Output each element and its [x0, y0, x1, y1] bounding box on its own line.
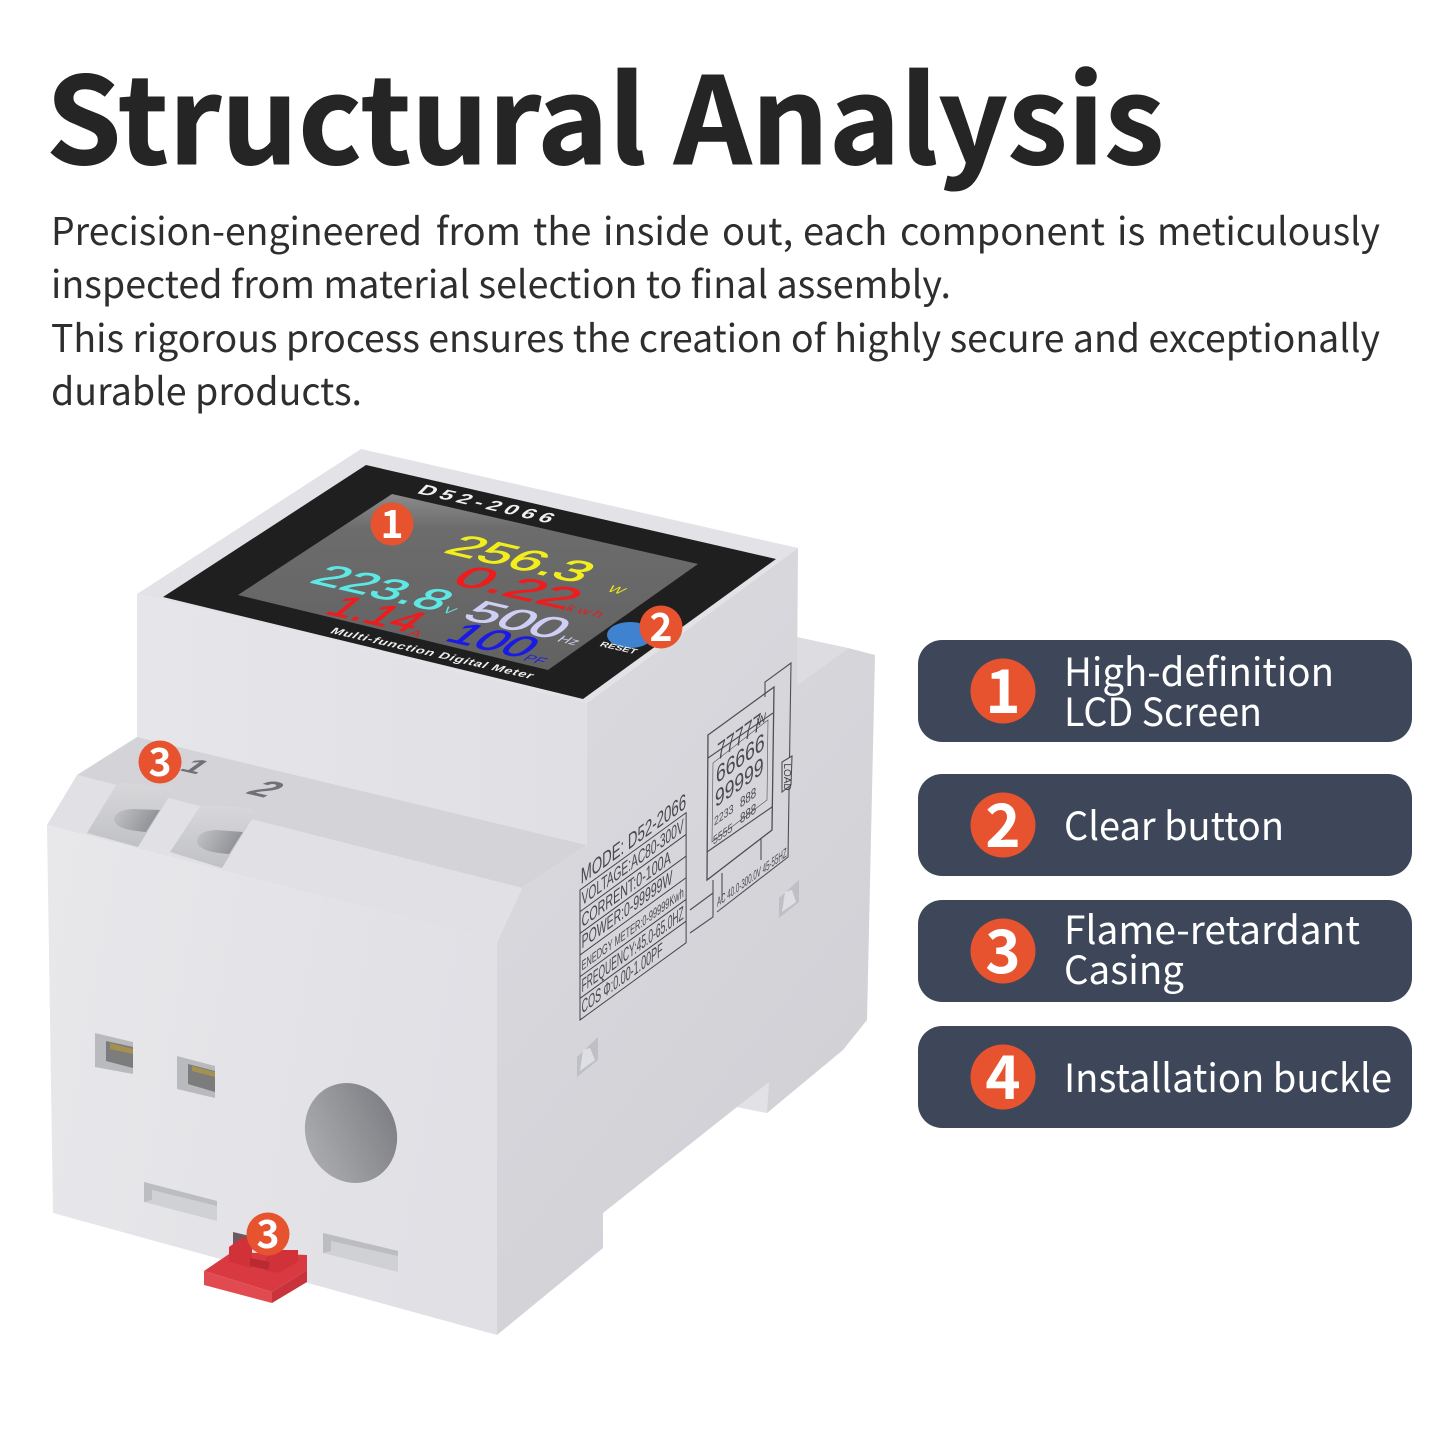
side and rail body: [497, 548, 875, 1335]
model text: D52-2066: [413, 482, 560, 526]
intro paragraph: [51, 201, 1380, 416]
intro paragraph: out,: [722, 201, 793, 256]
wiring diagram: AC 40.0-300.0V 45-55HZ: [717, 844, 787, 910]
intro paragraph: inside: [603, 201, 709, 256]
legend pill 1: [918, 640, 1412, 742]
callout 2 on button: 2: [649, 597, 673, 653]
lcd readings: 256.3: [435, 529, 606, 589]
intro paragraph: the: [533, 201, 591, 256]
front slot 1: [95, 1033, 133, 1074]
intro paragraph: inspected from material selection to final assembly.: [51, 254, 951, 309]
lcd readings: Hz: [553, 634, 583, 648]
lcd readings: 1.14: [316, 590, 437, 638]
lower slot left: [144, 1182, 217, 1221]
wiring diagram: [690, 663, 792, 933]
callout 3 on casing: 3: [148, 732, 172, 788]
intro paragraph: This rigorous process ensures the creation of highly secure and exceptionally: [51, 308, 1380, 363]
terminal number 1: 1: [173, 755, 218, 778]
side specification label: ENEDGY METER:0-99999Kwh: [582, 883, 684, 974]
legend pill 1: 1: [985, 644, 1021, 731]
wiring diagram: W: [757, 709, 767, 730]
reset label: RESET: [597, 641, 639, 656]
wiring diagram: 99999: [715, 752, 764, 814]
legend pill 3: Casing: [1064, 940, 1184, 996]
lcd readings: 500: [453, 595, 583, 645]
lcd readings: kwh: [561, 603, 607, 620]
lcd readings: W: [603, 584, 629, 597]
callout 3 on buckle: 3: [256, 1204, 280, 1260]
intro paragraph: from: [436, 201, 521, 256]
legend pill 1: High-definition: [1064, 642, 1334, 698]
callout 1 on screen: 1: [380, 494, 404, 550]
legend pill 2: [918, 774, 1412, 876]
side specification label: MODE: D52-2066: [581, 788, 686, 889]
side specification label: [580, 788, 686, 1020]
product: din rail digital meter: [47, 449, 875, 1335]
legend pill 4: 4: [985, 1030, 1021, 1117]
intro paragraph: Precision-engineered: [51, 201, 422, 256]
wiring diagram: 5555: [713, 820, 733, 848]
side specification label: COS Φ:0.00-1.00PF: [582, 939, 663, 1019]
lcd readings: A: [404, 628, 426, 640]
wiring diagram: 888: [740, 783, 756, 811]
intro paragraph: durable products.: [51, 361, 362, 416]
lcd readings: [301, 529, 629, 667]
legend pill 1: LCD Screen: [1064, 682, 1262, 738]
chamfer face: [47, 775, 522, 942]
lcd readings: 223.8: [301, 559, 465, 617]
lcd readings: V: [438, 605, 460, 617]
lower slot right: [323, 1233, 398, 1272]
top face: [137, 449, 798, 703]
terminal 2: [170, 805, 255, 868]
side specification label: CORRENT:0-100A: [582, 847, 671, 933]
black faceplate: [163, 465, 776, 699]
lcd readings: 0.22: [442, 560, 594, 615]
title: Structural Analysis: [46, 25, 1164, 199]
reset button: [607, 622, 653, 648]
wiring diagram: LOAD: [781, 763, 792, 791]
intro paragraph: meticulously: [1157, 201, 1380, 256]
legend pill 4: Installation buckle: [1064, 1048, 1392, 1104]
upper front face: [137, 594, 587, 845]
callout 2 on button: [640, 597, 682, 653]
callout 3 on buckle: [246, 1204, 290, 1260]
wiring diagram: 77777: [717, 708, 762, 767]
callout 3 on casing: [138, 732, 182, 788]
round opening: [289, 1068, 413, 1198]
legend pill 4: [918, 1026, 1412, 1128]
lcd screen: [238, 494, 698, 670]
lcd readings: PF: [519, 653, 550, 667]
side specification label: VOLTAGE:AC80-300V: [582, 815, 684, 911]
lower front face: [47, 825, 497, 1335]
lcd readings: 100: [436, 617, 551, 664]
side hole lower: [577, 1037, 598, 1077]
intro paragraph: component: [900, 201, 1105, 256]
intro paragraph: is: [1117, 201, 1145, 256]
side hole upper: [779, 880, 799, 918]
legend pill 2: 2: [985, 778, 1021, 865]
intro paragraph: each: [803, 201, 887, 256]
legend pill 3: 3: [985, 904, 1021, 991]
legend pill 3: Flame-retardant: [1064, 900, 1360, 956]
side specification label: FREQUENCY:45.0-65.0HZ: [582, 902, 684, 998]
legend pill 2: Clear button: [1064, 796, 1284, 852]
wiring diagram: 888: [740, 799, 756, 827]
terminal number 2: 2: [236, 776, 295, 802]
rail foot: [737, 1082, 769, 1113]
callout 1 on screen: [370, 494, 414, 550]
rail notch: [797, 637, 848, 685]
terminal shelf: [77, 737, 587, 888]
terminal 1: [87, 783, 172, 847]
installation buckle: [204, 1232, 307, 1303]
wiring diagram: 2233: [714, 801, 734, 829]
faceplate label: Multi-function Digital Meter: [329, 625, 537, 681]
side specification label: POWER:0-99999W: [582, 867, 672, 954]
legend pill 3: [918, 900, 1412, 1002]
front slot 2: [177, 1056, 215, 1098]
wiring diagram: 66666: [716, 728, 765, 790]
